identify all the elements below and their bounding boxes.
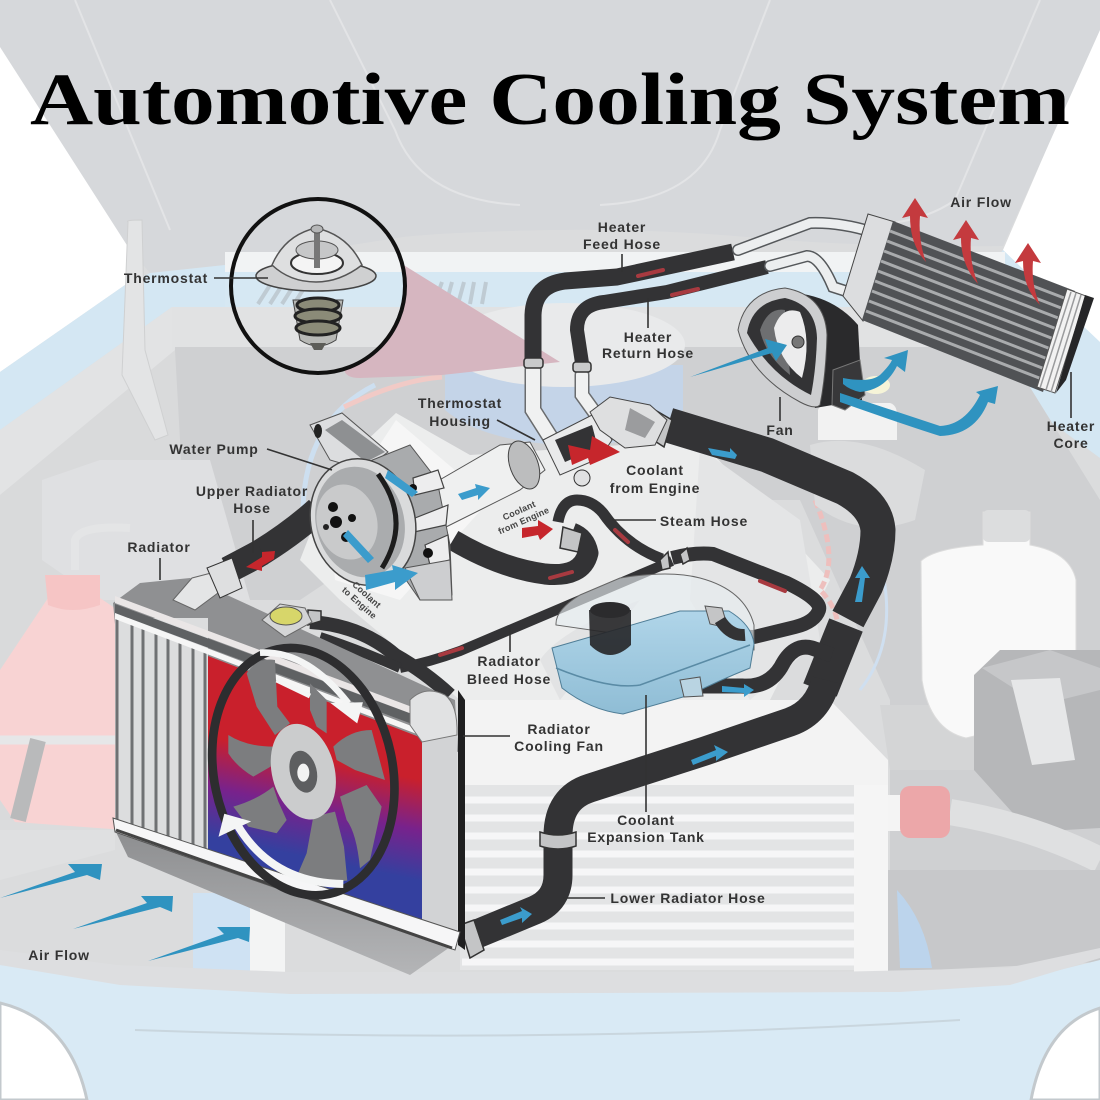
windshield vent hatching [258,282,486,304]
label: coolant expansion tank [587,695,705,845]
windshield [225,252,1005,272]
coolant expansion tank [552,574,754,714]
label: thermostat: Thermostat [124,270,208,286]
big clamps [308,410,690,958]
label: coolant to engine rotated: Coolant [350,579,383,610]
radiator core [208,656,422,940]
label: radiator bleed hose: Radiator [477,653,541,669]
label: radiator: Radiator [127,539,191,555]
fan ring [190,631,417,912]
heater feed hose [533,252,733,360]
label: coolant from engine rotated: from Engine [497,505,551,536]
air filter [445,365,683,446]
flow arrows [0,198,1041,961]
water pump and thermostat housing [296,397,667,600]
label: coolant to engine rotated: to Engine [340,585,379,621]
lower radiator hose [668,425,878,619]
title: Automotive Cooling System [30,59,1070,141]
upper radiator hose fitting [173,551,275,610]
red coolant arrows [522,436,620,540]
label: steam hose: Steam Hose [660,513,748,529]
tank side hose [701,647,832,686]
fluid reservoir behind fan [818,403,897,440]
label: coolant to engine rotated [340,577,386,621]
steam hose [558,500,662,559]
label: water pump: Water Pump [169,441,259,457]
dark engine bay [170,347,1100,960]
label: thermostat housing: Thermostat [418,395,502,411]
top surface [113,578,458,752]
red reservoir [0,598,125,830]
label: heater feed hose: Heater [598,219,646,235]
label: fan: Fan [766,422,794,438]
engine block [300,413,830,700]
bottom tank [115,830,453,975]
label: air flow bottom: Air Flow [28,947,90,963]
heater core [843,214,1094,393]
pump body [360,445,452,600]
label: coolant from engine rotated [492,495,551,536]
headlights [0,1003,87,1100]
housing box [543,413,612,475]
white coolant jug [921,512,1076,738]
blades [228,659,385,881]
wiper arm [122,220,168,440]
label: heater core [1047,372,1095,451]
battery [974,650,1100,832]
intercooler shroud and grid [460,700,888,800]
pulley [296,447,430,597]
heater hose clamps [524,358,591,372]
white rotation arrows [260,653,348,703]
label: radiator cooling fan: Radiator [527,721,591,737]
label: radiator cooling fan: Cooling Fan [514,738,604,754]
label: heater core: Heater [1047,418,1095,434]
label: heater return hose [602,298,694,361]
pump to engine hose [453,533,588,575]
hub [261,717,345,826]
label: radiator bleed hose: Bleed Hose [467,671,551,687]
label: radiator [127,539,191,580]
label: upper radiator hose: Hose [233,500,271,516]
pink wires right [815,500,838,660]
radiator cooling fan [190,631,417,912]
label: coolant expansion tank: Expansion Tank [587,829,705,845]
pink zoom beam [344,264,560,378]
upper radiator hose [228,510,318,570]
radiator cap [262,604,312,637]
fender blue left and right [0,265,225,430]
label: fan [766,397,794,438]
label: thermostat housing [418,395,535,440]
label: heater return hose: Return Hose [602,345,694,361]
cowl [172,307,1010,350]
hose red markings [440,270,785,655]
heater pipes to thermostat housing [533,370,600,440]
label: coolant from engine: Coolant [626,462,684,478]
front bumper [0,960,1100,1100]
label: radiator cooling fan [463,721,604,754]
inset: thermostat circle [231,199,405,373]
tube from housing to pump [405,442,545,530]
label: radiator bleed hose [467,627,551,687]
label: steam hose [612,513,748,529]
label: lower radiator hose: Lower Radiator Hose [610,890,766,906]
top tank strips [115,596,455,730]
label: coolant expansion tank: Coolant [617,812,675,828]
blower fan [738,288,865,410]
heater core pipes [738,223,872,295]
fins [115,618,208,857]
label: heater feed hose: Feed Hose [583,236,661,252]
open hood [0,0,1100,273]
radiator overflow hose [310,622,450,695]
label: heater feed hose [583,219,661,272]
blue air flow arrows [0,339,998,961]
radiator bleed hose [400,561,672,668]
label: coolant from engine rotated: Coolant [501,499,537,522]
label: upper radiator hose: Upper Radiator [196,483,308,499]
label: air flow top: Air Flow [950,194,1012,210]
red air flow arrows [902,198,1041,305]
label: thermostat housing: Housing [429,413,491,429]
right side tank [422,722,457,942]
gray hose under jug [880,705,1000,770]
mount bracket [310,413,388,470]
blue and pink engine wires [303,385,375,510]
label: coolant from engine: from Engine [610,480,700,496]
radiator [113,578,465,975]
label: heater core: Core [1053,435,1089,451]
white sky gaps [0,40,135,372]
label: water pump [169,441,332,470]
label: coolant from engine [610,462,700,496]
coolant flow arrows [343,448,870,925]
heater return hose [577,267,767,363]
label: heater return hose: Heater [624,329,672,345]
radiator hose right, pink flange [950,812,1100,860]
label: upper radiator hose [196,483,308,553]
hoses [308,252,878,958]
